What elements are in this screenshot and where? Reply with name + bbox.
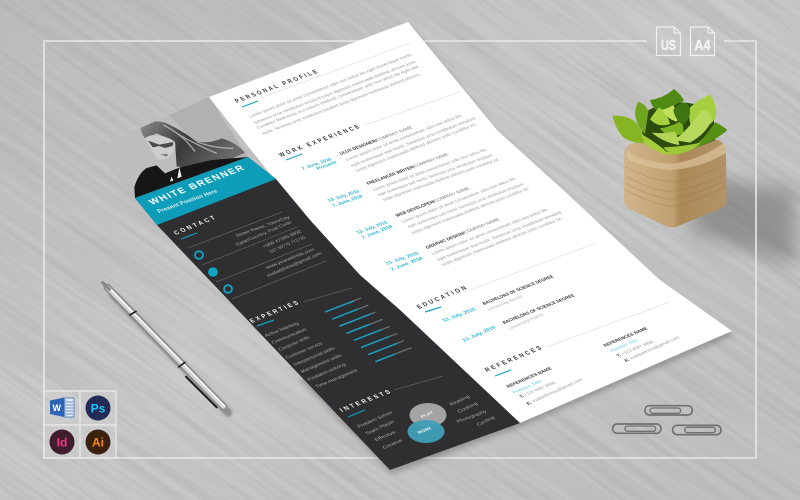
job: freelancer writer: turpis dignissim malesuada eleifend ultricies justo curabitur lot. bbox=[382, 158, 501, 202]
succulent in wooden pot bbox=[612, 89, 727, 227]
job: web developer: Lorem ipsum dolor sit amet consectetuer odio non tellus lite. bbox=[401, 177, 518, 224]
skill names: Interpersonal skills bbox=[292, 346, 336, 367]
resume paper bbox=[90, 22, 734, 474]
profile text: morbi. Senectus urna Vestibulum tincidunt turpis dignissim malesuada eleifend ultricies. bbox=[261, 73, 422, 136]
contact details bbox=[234, 214, 323, 278]
contact details: mailaddress@gmail.com bbox=[265, 251, 323, 278]
interests right list bbox=[448, 394, 496, 427]
interests right list: Cycling bbox=[475, 415, 496, 427]
skill names bbox=[263, 321, 359, 389]
venn circle: work: WORK bbox=[416, 426, 434, 435]
skill names: Problem-solving bbox=[306, 362, 347, 382]
job: web developer: eget scelerisque sed morbi. Senectus urna Vestibulum tincidunt bbox=[407, 182, 526, 229]
job: freelancer writer: Lorem ipsum dolor sit amet consectetuer odio non tellus lite. bbox=[372, 148, 489, 192]
reference two bbox=[602, 326, 681, 363]
job: graphic design bbox=[384, 207, 564, 272]
interests section bbox=[339, 376, 496, 450]
job: web developer: 13. July, 2015 bbox=[355, 220, 389, 235]
degree one bbox=[441, 274, 555, 323]
degree two bbox=[461, 293, 576, 343]
face bbox=[145, 135, 175, 160]
profile text: Curabitur Maecenas orci mauris eleifend, consectetuer odio non tellus lite eget sed. bbox=[256, 65, 421, 130]
job: graphic design: GRAPHIC DESIGN/COMPANY NAME bbox=[424, 217, 501, 250]
job: UI UX designer: Present bbox=[315, 160, 339, 171]
skill names: Time management bbox=[314, 368, 359, 389]
education section bbox=[416, 243, 596, 343]
experience heading: WORK EXPERIENCE bbox=[278, 123, 363, 159]
plant shadow bbox=[690, 175, 795, 265]
skill names: Management skills bbox=[299, 353, 343, 374]
job: web developer: 7. June, 2018 bbox=[360, 224, 394, 240]
pen bbox=[103, 283, 228, 413]
profile text: Senectus urna Vestibulum tincidunt turpis dignissim malesuada eleifend ultricies justo. bbox=[253, 60, 418, 125]
references section bbox=[484, 302, 681, 406]
skill names: Customer service bbox=[284, 341, 324, 360]
job: freelancer writer: 13. July, 2015 bbox=[326, 189, 361, 203]
degree one: University Name bbox=[486, 294, 524, 312]
reference two: REFERENCES NAME bbox=[602, 326, 649, 348]
reference two: T. +123 4567 9899, bbox=[615, 339, 656, 358]
references heading: REFERENCES bbox=[484, 345, 546, 374]
paper clips bbox=[613, 406, 721, 435]
skill names: Computer skills bbox=[277, 335, 311, 352]
skill names: Active listening bbox=[263, 321, 300, 338]
contact icons bbox=[195, 251, 232, 293]
wooden pot bbox=[624, 139, 727, 227]
venn circle: play: PLAY bbox=[419, 409, 436, 419]
job: UI UX designer: turpis dignissim malesuada eleifend ultricies justo curabitur lot. bbox=[355, 122, 478, 173]
reference one: T. +123 4567 9899, bbox=[518, 380, 558, 399]
photo panel bbox=[132, 97, 248, 198]
teal name band bbox=[135, 157, 276, 225]
reference two: E. mailaddress@gmail.com bbox=[624, 335, 681, 363]
position: Present Position Here bbox=[156, 188, 220, 215]
job: UI UX designer: eget scelerisque sed morbi. Senectus urna Vestibulum tincidunt bbox=[350, 117, 477, 168]
contact details: www.yourwebsite.com bbox=[265, 247, 316, 270]
badge: A4: A4 bbox=[694, 38, 710, 54]
interests left list: Effective bbox=[373, 430, 397, 442]
contact details: 017 80770 771733 bbox=[268, 235, 307, 254]
reference one bbox=[505, 366, 584, 406]
skill bars bbox=[325, 298, 411, 362]
interests left list: Creative bbox=[381, 438, 404, 450]
interests right list: Reading bbox=[448, 394, 471, 407]
interests right list: Cooking bbox=[456, 401, 479, 414]
expertise section bbox=[249, 288, 411, 389]
personal profile section bbox=[234, 43, 422, 136]
contact details: +960 47265-9892 bbox=[261, 229, 303, 249]
software icon grid bbox=[44, 391, 116, 458]
venn circle: work bbox=[408, 420, 444, 443]
icon: Word: W bbox=[53, 403, 62, 413]
job: graphic design: Lorem ipsum dolor sit amet consectetuer odio non tellus lite. bbox=[431, 207, 550, 256]
contact section bbox=[173, 212, 326, 299]
reference one: REFERENCES NAME bbox=[505, 366, 553, 389]
interests left list bbox=[356, 410, 404, 450]
job: graphic design: turpis dignissim malesuada eleifend ultricies justo curabitur lot. bbox=[441, 216, 564, 267]
interests heading: INTERESTS bbox=[339, 388, 395, 414]
job: freelancer writer: eget scelerisque sed morbi. Senectus urna Vestibulum tincidunt bbox=[377, 153, 495, 197]
icon: InDesign: Id bbox=[57, 436, 67, 450]
reference two: Position Title bbox=[609, 338, 639, 353]
job: web developer bbox=[355, 177, 531, 240]
reference one: E. mailaddress@gmail.com bbox=[526, 377, 584, 406]
job: graphic design: 13. July, 2015 bbox=[384, 251, 420, 266]
degree two: BACHELORS OF SCIENCE DEGREE bbox=[501, 293, 576, 325]
job: freelancer writer: 7. June, 2018 bbox=[331, 194, 364, 208]
clip three bbox=[673, 425, 721, 435]
job: graphic design: 7. June, 2018 bbox=[389, 256, 424, 272]
name block bbox=[147, 163, 248, 215]
job: UI UX designer: Lorem ipsum dolor sit amet consectetuer odio non tellus lite. bbox=[345, 113, 464, 162]
contact details: Street Name, Town/City bbox=[234, 214, 291, 238]
paper shadow bbox=[300, 24, 734, 474]
degree one: BACHELORS OF SCIENCE DEGREE bbox=[481, 274, 555, 306]
expertise heading: EXPERTIES bbox=[249, 299, 303, 325]
clip two bbox=[613, 424, 661, 433]
work experience section bbox=[278, 92, 564, 272]
degree one: 13. July, 2015 bbox=[441, 307, 477, 323]
job: graphic design: eget scelerisque sed morbi. Senectus urna Vestibulum tincidunt bbox=[436, 211, 563, 262]
reference one: Position Title bbox=[511, 379, 543, 395]
clip one bbox=[645, 406, 692, 415]
job: UI UX designer bbox=[300, 113, 478, 173]
contact heading: CONTACT bbox=[173, 214, 220, 237]
degree two: 13. July, 2015 bbox=[461, 325, 497, 343]
format badges US and A4 bbox=[656, 27, 714, 56]
contact details: Satte/Country, Post Code bbox=[234, 219, 294, 247]
leaves bbox=[612, 89, 727, 156]
interests left list: Problem Solver bbox=[356, 410, 395, 429]
interests right list: Photography bbox=[455, 409, 488, 424]
icon: Photoshop: Ps bbox=[91, 402, 106, 416]
job: web developer: WEB DEVELOPER/COMPANY NAME bbox=[394, 186, 471, 218]
profile text: Lorem ipsum dolor sit amet consectetuer odio non tellus lite eget scelerisque morbi. bbox=[248, 53, 414, 119]
profile heading: PERSONAL PROFILE bbox=[234, 68, 321, 104]
degree two: University Name bbox=[507, 312, 545, 331]
job: freelancer writer bbox=[326, 148, 501, 208]
badge: US: US bbox=[661, 38, 676, 54]
education heading: EDUCATION bbox=[416, 284, 471, 311]
job: web developer: turpis dignissim malesuada eleifend ultricies justo curabitur lot. bbox=[411, 186, 531, 235]
job: freelancer writer: FREELANCER WRITER/COMPANY NAME bbox=[365, 152, 450, 186]
interests left list: Team Player bbox=[364, 418, 397, 436]
hair bbox=[141, 121, 245, 168]
icon: Illustrator: Ai bbox=[92, 436, 104, 450]
job: UI UX designer: UI,UX DESIGNER/ COMPANY NAME bbox=[338, 125, 414, 156]
name: WHITE BRENNER bbox=[147, 163, 248, 207]
frame outline bbox=[44, 41, 756, 458]
profile text bbox=[248, 53, 422, 136]
torso bbox=[134, 157, 248, 198]
skill names: Communication bbox=[270, 327, 308, 345]
venn circle: play bbox=[410, 403, 446, 427]
job: UI UX designer: 7. June, 2018 bbox=[300, 157, 333, 171]
white page bbox=[209, 22, 732, 423]
dark sidebar bbox=[135, 157, 520, 470]
